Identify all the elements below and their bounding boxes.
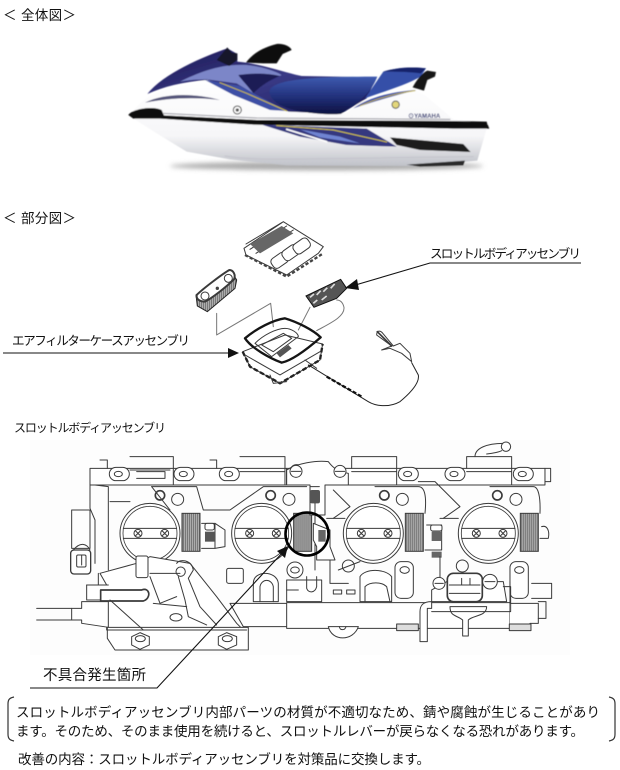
left half detail bbox=[37, 457, 312, 650]
rear seat bbox=[365, 67, 426, 98]
notice line 2: ます。そのため、そのまま使用を続けると、スロットルレバーが戻らなくなる恐れがあります。 bbox=[16, 723, 584, 739]
right half detail bbox=[287, 442, 552, 642]
callout: fault location: 不具合発生箇所 bbox=[43, 667, 146, 684]
handlebar bbox=[246, 44, 292, 63]
illustration: jet ski bbox=[128, 44, 489, 170]
throttle cable bbox=[308, 363, 418, 406]
rear grab handle bbox=[413, 71, 436, 91]
gasket bbox=[245, 318, 321, 363]
heading: overall view: ＜ 全体図＞ bbox=[3, 8, 76, 23]
heading: throttle body assembly: スロットルボディアッセンブリ bbox=[14, 420, 166, 435]
guide lines bbox=[217, 300, 344, 335]
notice line 1: スロットルボディアッセンブリ内部パーツの材質が不適切なため、錆や腐蝕が生じることがあり bbox=[16, 704, 600, 720]
lighter blue cowl panel bbox=[180, 65, 282, 93]
purple cowl bbox=[147, 48, 377, 114]
description: bracketed notice bbox=[8, 697, 615, 741]
diagram: throttle body assembly bbox=[30, 440, 570, 655]
white hull bbox=[130, 80, 488, 166]
callout: throttle body assembly bbox=[345, 246, 581, 290]
lower hull strake bbox=[407, 161, 465, 167]
brackets bbox=[8, 697, 615, 741]
callout: air filter case assembly bbox=[3, 333, 239, 358]
seat bbox=[270, 77, 377, 114]
air filter element bbox=[196, 270, 237, 312]
rub rail bbox=[128, 108, 489, 129]
deck stripes bbox=[205, 80, 287, 111]
badge round bbox=[233, 106, 241, 114]
air box lid bbox=[244, 222, 323, 277]
ground shadow bbox=[170, 162, 483, 170]
hull graphic bbox=[262, 125, 397, 147]
YAMAHA logo: ⊙YAMAHA bbox=[408, 112, 441, 120]
air box case bbox=[243, 328, 323, 383]
improvement details: 改善の内容：スロットルボディアッセンブリを対策品に交換します。 bbox=[18, 751, 430, 767]
diagram: air filter exploded view bbox=[196, 222, 418, 406]
callout: air filter case assembly: エアフィルターケースアッセンブリ bbox=[12, 333, 190, 348]
callout: throttle body assembly: スロットルボディアッセンブリ bbox=[430, 246, 581, 261]
throttle lever bbox=[377, 331, 412, 362]
marker: fault location circle bbox=[286, 512, 328, 556]
throttle body miniature bbox=[306, 279, 347, 307]
callout: fault location bbox=[30, 546, 288, 688]
heading: part view: ＜ 部分図＞ bbox=[3, 211, 76, 226]
gauge bbox=[392, 101, 399, 108]
rear intake panel bbox=[390, 137, 471, 152]
